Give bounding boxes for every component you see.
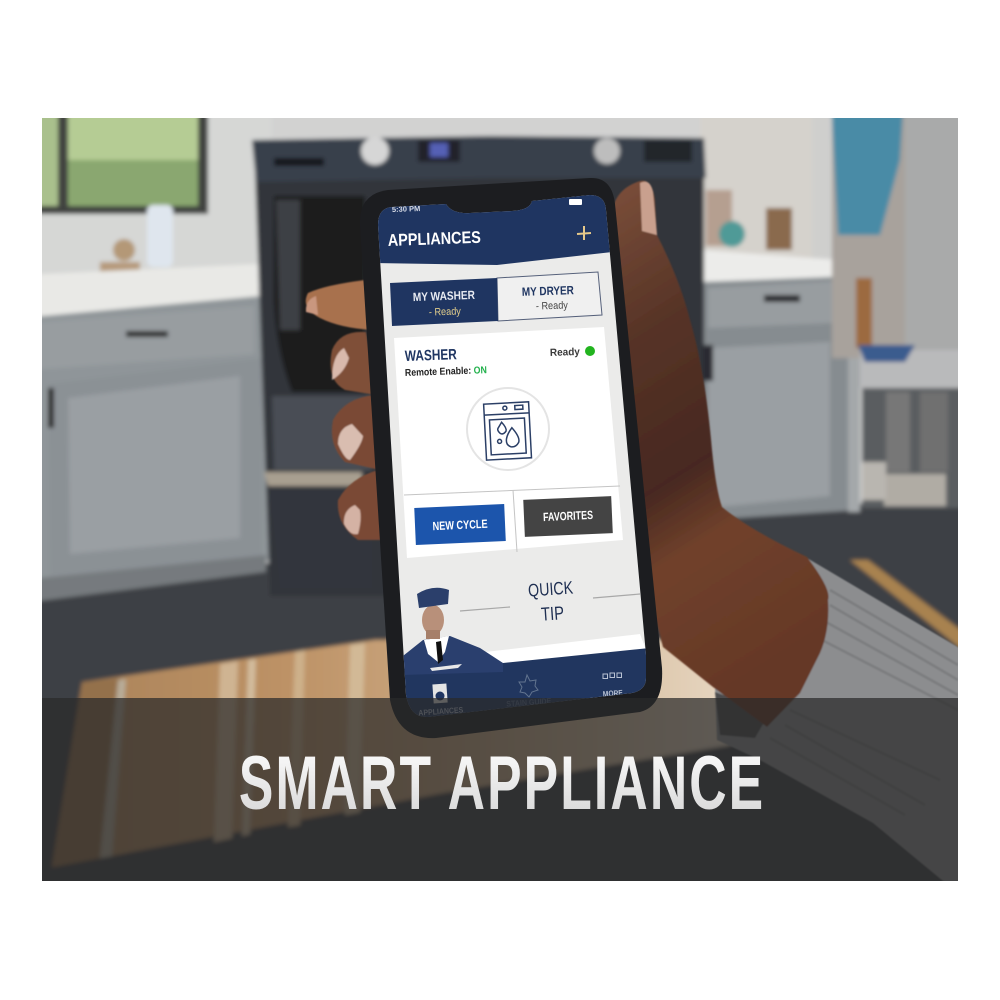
phone body	[360, 178, 662, 738]
hand and sweater sleeve	[614, 180, 958, 881]
washer and dryer	[255, 170, 704, 596]
button: new cycle: NEW CYCLE	[432, 517, 488, 533]
thumbnail	[640, 182, 657, 235]
washer status card: Ready	[550, 346, 580, 359]
left counter	[42, 264, 260, 318]
bottom navigation	[404, 648, 646, 717]
button: favorites	[523, 496, 613, 537]
icon: battery	[569, 199, 582, 205]
button: new cycle	[414, 504, 506, 545]
rug on floor	[52, 640, 730, 867]
title: SMART APPLIANCE	[239, 740, 763, 825]
tabs: my washer / my dryer: MY DRYER	[522, 283, 574, 299]
washer status card: WASHER	[405, 346, 457, 365]
fingers	[306, 280, 386, 540]
bottom navigation: STAIN GUIDE	[506, 696, 552, 709]
bottle and items on counter	[147, 205, 173, 267]
washer door	[274, 196, 365, 392]
quick tip: TIP	[540, 603, 565, 626]
washer status card: Remote Enable: ON	[405, 365, 487, 379]
tabs: my washer / my dryer: MY WASHER	[413, 288, 475, 304]
photo: laundry room background	[42, 118, 958, 881]
caption band	[42, 698, 958, 881]
right cabinet	[704, 276, 858, 520]
thumb, palm and wrist	[612, 181, 829, 727]
icon: add	[577, 226, 591, 240]
quick tip: QUICK	[527, 577, 574, 601]
tabs: my washer / my dryer: - Ready	[536, 299, 569, 313]
shelving	[830, 118, 908, 360]
app header: APPLIANCES	[387, 228, 481, 250]
right counter	[701, 249, 834, 284]
phone	[360, 178, 670, 740]
items	[706, 190, 732, 246]
button: favorites: FAVORITES	[543, 508, 593, 524]
sweater sleeve	[714, 558, 958, 881]
washer status card	[394, 327, 623, 558]
left cabinet	[42, 294, 272, 580]
tabs: my washer / my dryer: - Ready	[429, 305, 462, 319]
window	[42, 118, 211, 217]
app header: 5:30 PM	[392, 204, 420, 214]
bottom navigation: APPLIANCES	[418, 705, 464, 718]
quick tip	[460, 581, 640, 620]
white strip above nav	[485, 634, 646, 665]
tabs: my washer / my dryer	[390, 272, 602, 326]
app header	[378, 195, 610, 265]
floor	[42, 502, 958, 881]
icon: washer	[467, 388, 549, 470]
bottom navigation: MORE	[603, 688, 624, 699]
phone screen	[378, 195, 646, 717]
repairman figure	[398, 588, 503, 675]
